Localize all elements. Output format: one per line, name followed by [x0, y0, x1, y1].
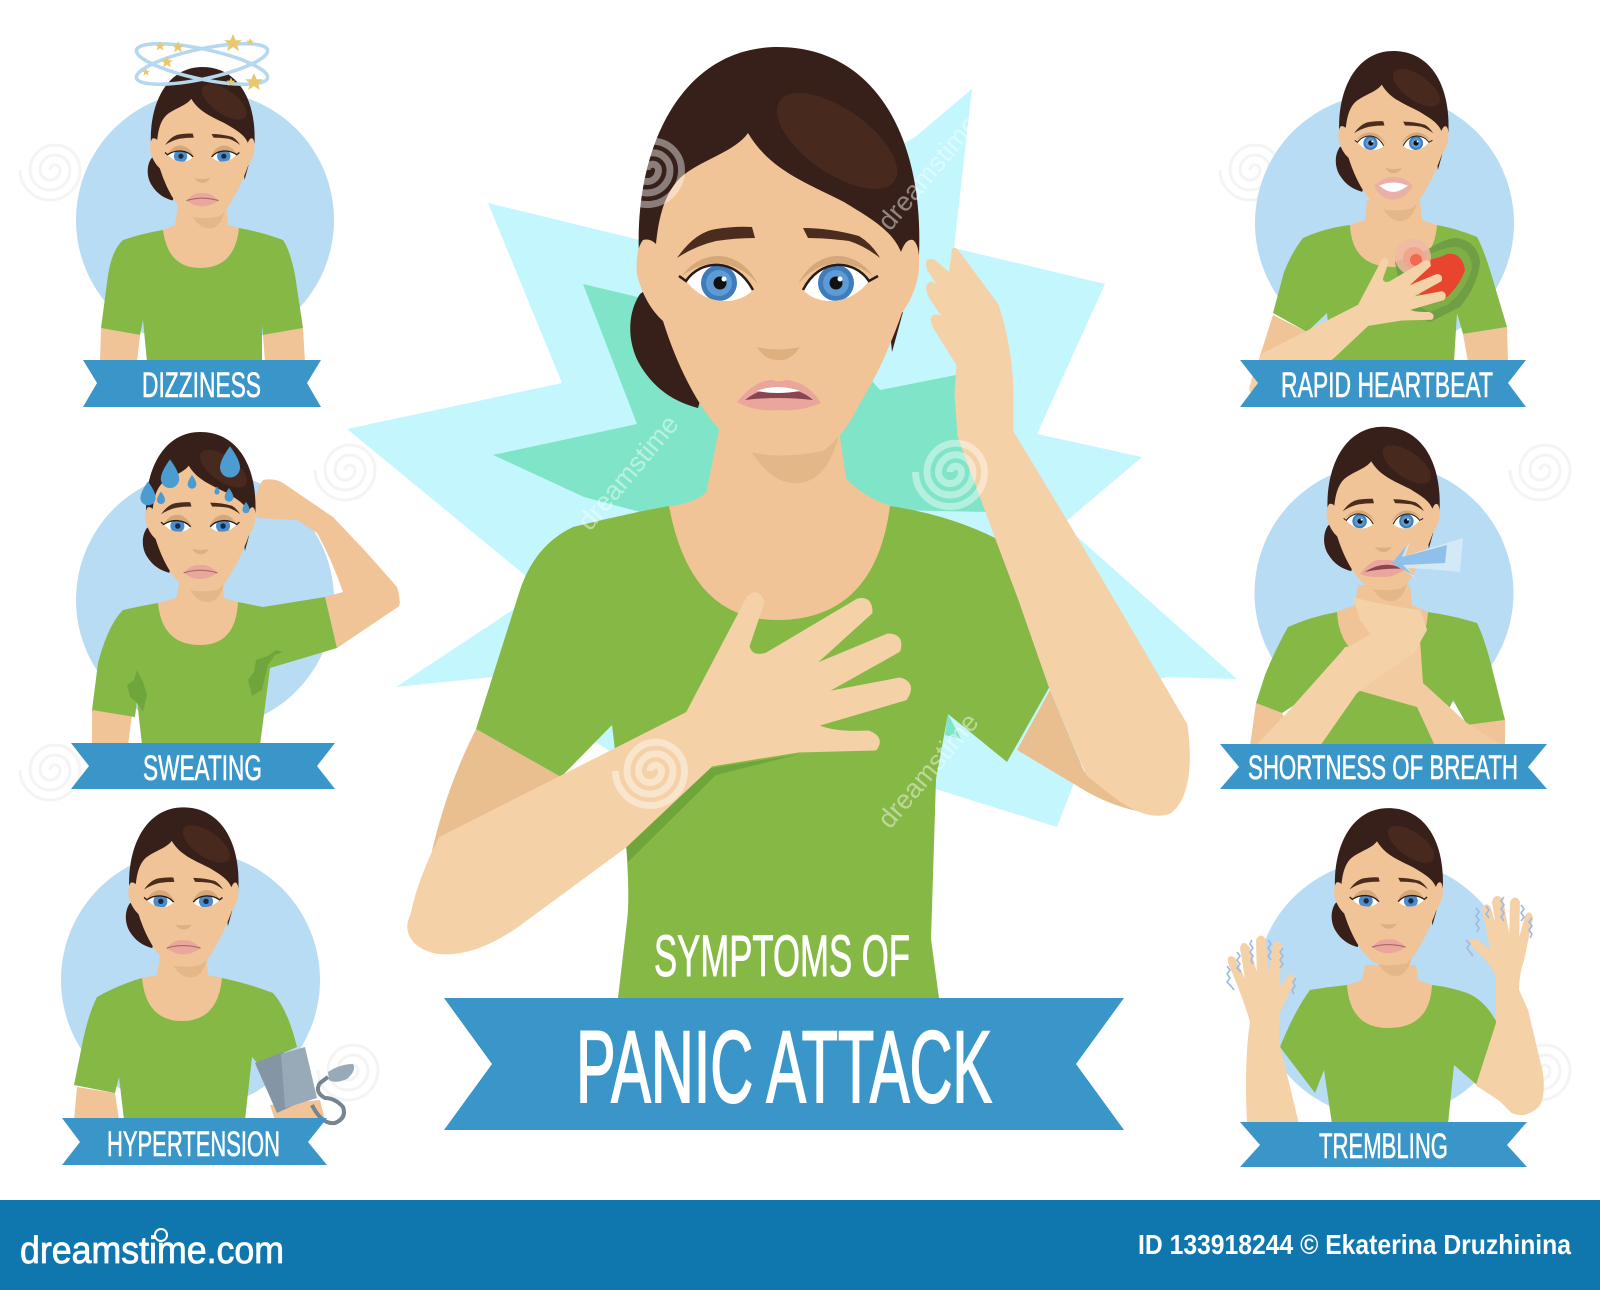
blue circle: [76, 471, 334, 729]
blue circle: [1256, 860, 1514, 1118]
head: [143, 432, 256, 602]
neck: [1347, 965, 1432, 1028]
breath arrow: [1392, 545, 1447, 575]
shirt: [1280, 985, 1497, 1124]
ribbon: [71, 743, 335, 789]
watermark spirals on white: [20, 145, 1570, 1100]
ribbon: [1240, 1122, 1527, 1167]
tremble squiggles: [1227, 897, 1532, 994]
neck: [669, 430, 890, 625]
green shirt: [476, 506, 1050, 998]
title ribbon: [444, 998, 1124, 1130]
arms and neck: [1258, 200, 1508, 362]
head: [126, 807, 239, 977]
watermark text: [572, 109, 985, 1134]
ribbon: [62, 1118, 327, 1165]
blue circle: [61, 850, 320, 1110]
watermark text: dreamstime: [872, 109, 985, 236]
sweat drops: [140, 446, 250, 513]
blue circle: [1254, 464, 1514, 722]
ribbon: [1240, 360, 1526, 407]
panel: sweating: [71, 432, 400, 789]
left upper arm: [430, 729, 561, 860]
starburst: light cyan: [347, 89, 1237, 900]
arms and neck: [100, 205, 305, 362]
watermark text: dreamstime: [872, 707, 985, 834]
red glow: [1395, 239, 1431, 275]
blue circle: [1255, 94, 1514, 352]
panel: trembling: [1227, 808, 1543, 1167]
shirt: [74, 978, 297, 1120]
shirt: [1273, 225, 1507, 362]
footer logo spiral: [155, 1229, 167, 1241]
shirt: [1256, 612, 1505, 746]
shirt: [101, 228, 303, 362]
dizzy rings: [133, 35, 271, 93]
label: SWEATING: [143, 749, 262, 788]
watermark text: dreamstime: [575, 1007, 688, 1134]
crossed arms: [1255, 597, 1503, 746]
watermark text: dreamstime: [572, 409, 685, 536]
blood pressure cuff: [255, 1047, 317, 1113]
ribbon: [83, 360, 321, 407]
upper arms and neck: [1250, 585, 1505, 746]
watermark spirals over figure: [612, 141, 992, 1092]
heart glow on shirt: [1395, 238, 1480, 322]
dizzy stars: [142, 34, 263, 90]
hand on chest: [410, 595, 909, 952]
breath arrow: ghost: [1395, 538, 1463, 578]
panel: rapid heartbeat: [1240, 51, 1526, 407]
starburst: mint: [493, 284, 1000, 520]
left arm and neck: [92, 580, 240, 745]
head: [1336, 51, 1449, 221]
head: [1324, 427, 1440, 601]
left arm and hand: [1229, 936, 1298, 1124]
footer logo: dreamstime.com: [20, 1230, 284, 1272]
label: HYPERTENSION: [107, 1125, 280, 1164]
hand shadow on shirt: [626, 754, 800, 862]
panel: central figure, panic attack: [347, 47, 1237, 1134]
panel: hypertension: [61, 807, 354, 1165]
hand on chest: [1250, 259, 1445, 398]
head: [630, 47, 919, 483]
footer band: [0, 1200, 1600, 1290]
ribbon: [1220, 744, 1547, 789]
raised right arm and hand: [927, 249, 1188, 814]
label: TREMBLING: [1319, 1127, 1448, 1166]
panel: shortness of breath: [1220, 427, 1547, 789]
heart: [1404, 254, 1465, 297]
head: [148, 67, 255, 228]
label: RAPID HEARTBEAT: [1281, 366, 1493, 405]
panel: dizziness: [76, 34, 334, 407]
sweat stains: [127, 650, 283, 712]
blue circle: [76, 91, 334, 349]
tube and bulb: [312, 1064, 354, 1123]
head: [1332, 808, 1443, 976]
title: panic attack: PANIC ATTACK: [576, 1010, 992, 1124]
right arm and hand: [1470, 897, 1543, 1114]
starburst fragment near sleeve: [945, 714, 961, 739]
label: DIZZINESS: [142, 366, 261, 405]
raised arm: [255, 479, 400, 648]
arms and neck: [74, 955, 325, 1120]
shirt: [92, 597, 337, 745]
heading: symptoms of: SYMPTOMS OF: [654, 924, 910, 989]
